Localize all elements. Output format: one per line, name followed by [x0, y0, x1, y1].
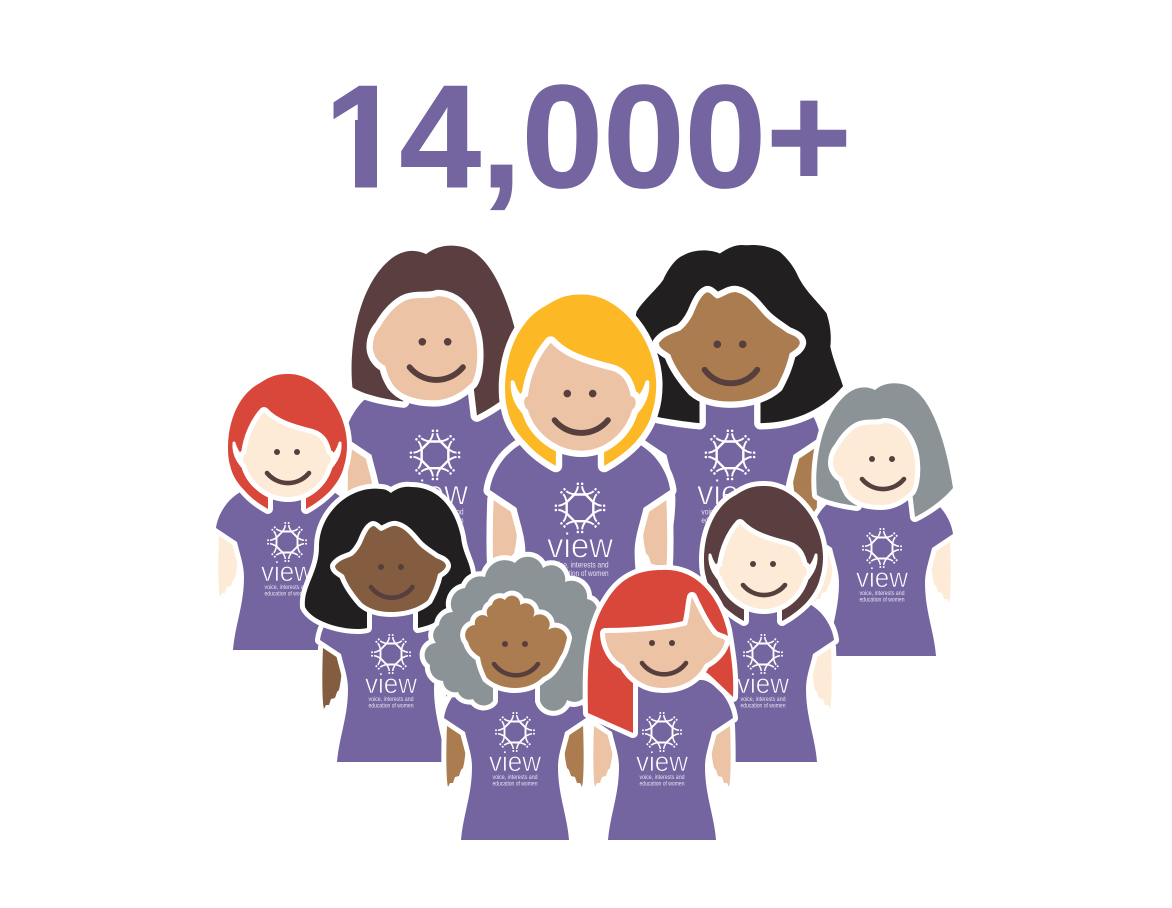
shirt logo: education of women [640, 780, 685, 788]
shirt logo: view [856, 562, 908, 593]
arms [493, 499, 667, 578]
shirt logo [636, 712, 688, 788]
arms [446, 725, 584, 787]
shirt logo: voice, interests and [406, 508, 464, 517]
t-shirt [490, 442, 670, 645]
arms [643, 446, 817, 525]
person: red-haired woman with fringe, front right [588, 570, 733, 840]
face [465, 596, 567, 688]
shirt logo: education of women [551, 569, 609, 578]
hair [636, 245, 843, 423]
hair [352, 246, 525, 415]
hair [588, 570, 733, 733]
shirt logo: education of women [860, 596, 905, 604]
hair [228, 374, 347, 509]
shirt logo: education of women [264, 590, 310, 598]
arms [348, 446, 522, 525]
shirt logo [365, 634, 417, 710]
shirt logo: voice, interests and [551, 561, 609, 570]
shirt logo [547, 482, 614, 578]
shirt logo [261, 522, 313, 598]
shirt logo: education of women [406, 516, 464, 525]
smile [555, 390, 608, 433]
shirt logo [402, 429, 469, 525]
shirt logo: view [402, 473, 469, 512]
smile [705, 341, 757, 383]
shirt logo [856, 528, 908, 604]
shirt logo [737, 634, 789, 710]
shirt logo: voice, interests and [740, 696, 786, 703]
smile [862, 456, 904, 489]
t-shirt [591, 680, 733, 840]
shirt logo: view [737, 668, 789, 699]
shirt logo [489, 712, 541, 788]
shirt logo: view [697, 473, 764, 512]
t-shirt [692, 602, 834, 762]
hair [305, 487, 471, 629]
hair [704, 486, 823, 621]
shirt logo: voice, interests and [860, 590, 905, 597]
shirt logo: voice, interests and [368, 696, 414, 703]
face [234, 412, 340, 497]
shirt logo: education of women [492, 780, 538, 788]
shirt logo: education of women [740, 702, 786, 710]
shirt logo: voice, interests and [640, 774, 685, 781]
person: black-haired woman, back right [636, 245, 843, 592]
person: red-haired woman, far left [216, 374, 358, 650]
person: black-haired woman, middle left [305, 487, 471, 762]
person: curly grey-haired woman, front left [425, 557, 597, 840]
face [833, 423, 915, 505]
face [605, 597, 725, 688]
shirt logo: view [636, 746, 688, 777]
shirt logo: view [547, 526, 614, 565]
person: dark-haired woman, middle right [692, 486, 834, 762]
t-shirt [320, 602, 462, 762]
shirt logo: education of women [368, 702, 414, 710]
shirt logo: view [365, 668, 417, 699]
smile [743, 561, 785, 595]
hair [816, 383, 953, 517]
person: blonde woman, centre [490, 294, 670, 645]
t-shirt [345, 389, 525, 592]
person: brown-haired woman, back left [345, 246, 525, 592]
t-shirt [640, 389, 820, 592]
face [710, 524, 816, 609]
t-shirt [811, 496, 953, 656]
face [513, 343, 647, 451]
hair [505, 294, 656, 466]
t-shirt [444, 680, 586, 840]
face [373, 296, 477, 400]
arms [218, 535, 356, 597]
hair [425, 557, 597, 711]
shirt logo: voice, interests and [264, 584, 310, 591]
title: 14,000+: 14,000+ [324, 55, 852, 219]
shirt logo [697, 429, 764, 525]
arms [593, 725, 731, 787]
arms [813, 541, 951, 603]
t-shirt [216, 490, 358, 650]
shirt logo: view [489, 746, 541, 777]
shirt logo: voice, interests and [701, 508, 759, 517]
shirt logo: voice, interests and [492, 774, 538, 781]
smile [642, 640, 686, 674]
face [659, 292, 800, 402]
smile [494, 641, 538, 675]
smile [371, 564, 412, 598]
arms [694, 647, 832, 709]
shirt logo: education of women [701, 516, 759, 525]
smile [410, 338, 463, 380]
person: grey-haired woman, far right [811, 383, 953, 656]
shirt logo: view [261, 556, 313, 587]
smile [267, 449, 309, 483]
face [335, 526, 446, 612]
arms [322, 647, 460, 709]
